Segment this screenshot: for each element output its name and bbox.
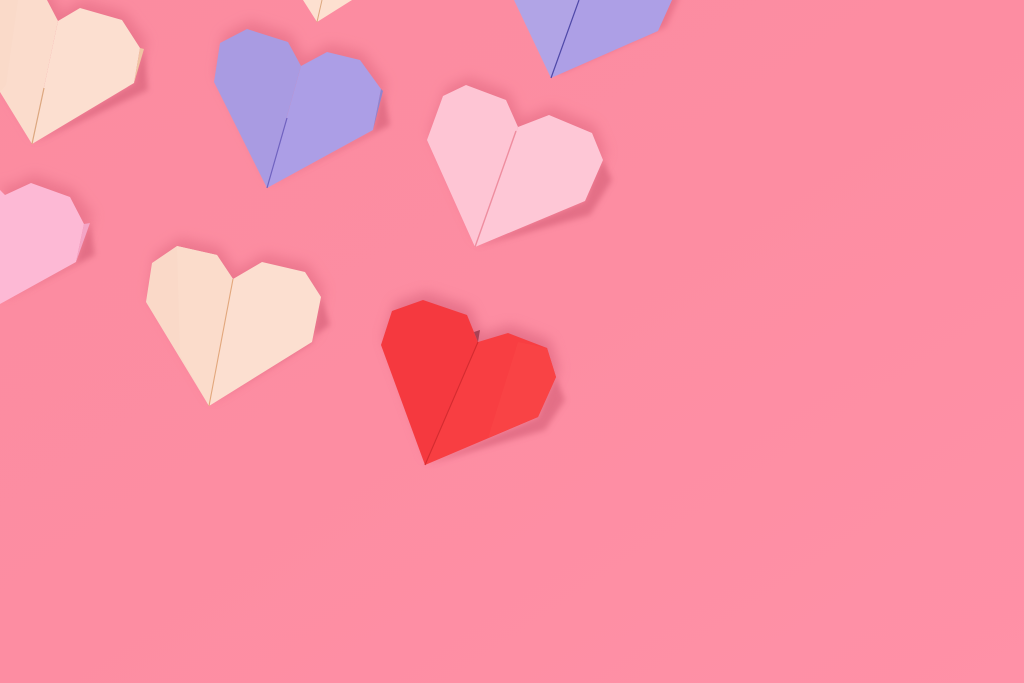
- heart: left pink: [0, 175, 95, 304]
- heart: purple top: [514, 0, 680, 78]
- heart: top center cream fragment: [303, 0, 352, 22]
- heart: cream: [146, 238, 330, 406]
- heart: red: [381, 292, 565, 465]
- heart: top-left peach: [0, 0, 148, 144]
- heart: purple left: [214, 21, 390, 188]
- heart: light pink: [427, 77, 612, 247]
